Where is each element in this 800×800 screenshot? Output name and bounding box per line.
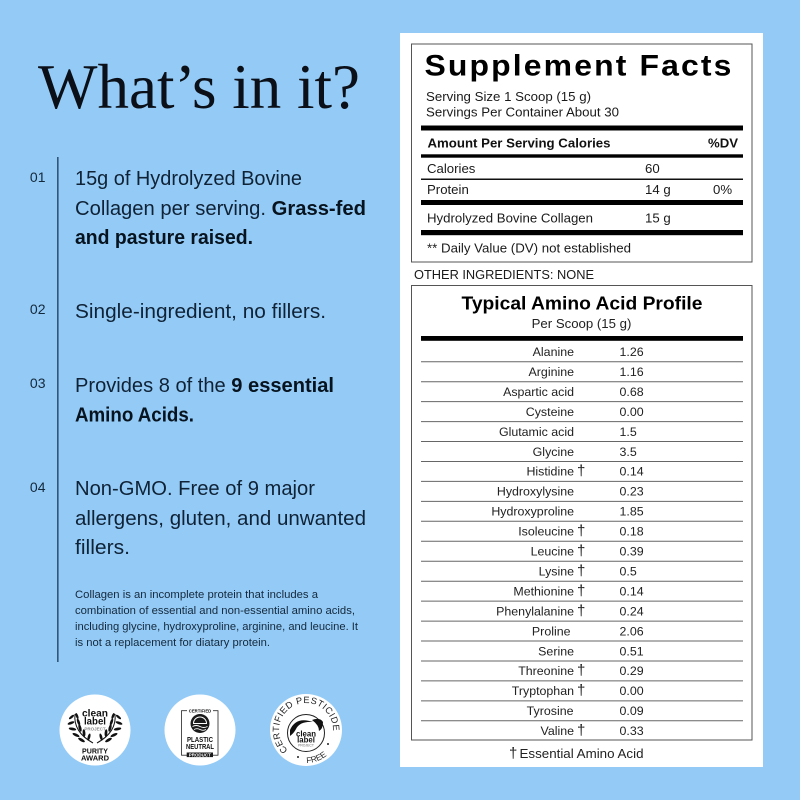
badge: clean label purity award: PROJECT [84,726,106,732]
list item 04: 04 [30,479,46,495]
collagen disclaimer text: Collagen is an incomplete protein that includes a [75,589,319,601]
vertical timeline rule [57,157,58,662]
amino acid table: 1.16 [620,365,644,379]
amino acid table: Methionine [513,584,574,598]
badge: plastic neutral product: PLASTIC [187,735,214,744]
amino acid table [421,345,743,739]
amino acid table: Tryptophan [512,684,574,698]
amino acid table: 0.00 [620,405,644,419]
amino acid table: 0.51 [620,644,644,658]
row: calories: Calories [427,161,476,176]
amino acid table: † [577,463,585,480]
amino acid table: 1.5 [620,425,637,439]
row: hydrolyzed bovine collagen: Hydrolyzed Bovine Collagen [427,210,593,225]
amino acid table: Histidine [526,465,574,479]
amino acid table: 0.14 [620,465,644,479]
amino acid table: † [577,523,585,540]
amino acid table: † [577,582,585,599]
badge: plastic neutral product: PRODUCT [189,752,211,757]
badge: plastic neutral product: CERTIFIED [189,708,212,714]
table header: %DV [708,135,738,150]
other ingredients: OTHER INGREDIENTS: NONE [414,267,594,282]
list item 03: Provides 8 of the 9 essential [75,375,334,397]
amino acid table: 2.06 [620,624,644,638]
title: What’s in it? [38,52,360,122]
amino acid table: 0.23 [620,485,644,499]
list item 03: 03 [30,375,46,391]
badge: certified pesticide free: PROJECT [298,744,314,748]
collagen disclaimer text [75,589,359,649]
amino acid table: 0.29 [620,664,644,678]
badge: certified pesticide free: CERTIFIED PESTICIDE [272,696,340,753]
amino acid table: 0.5 [620,564,637,578]
amino acid table: 0.39 [620,544,644,558]
badge: clean label purity award [60,694,130,766]
amino acid table: 0.14 [620,584,644,598]
list item 02: Single-ingredient, no fillers. [75,301,326,323]
serving information: Servings Per Container About 30 [426,105,619,120]
row: hydrolyzed bovine collagen: 15 g [645,210,671,225]
badge: certified pesticide free: label [297,736,315,744]
row: protein: 0% [713,182,732,197]
amino acid table: † [577,722,585,739]
row: calories: 60 [645,161,660,176]
footnote: daily value: ** Daily Value (DV) not established [427,240,631,255]
panel: supplement facts [412,44,752,262]
list item 01: 15g of Hydrolyzed Bovine [75,168,302,190]
amino acid table: † [577,542,585,560]
amino acid table: Aspartic acid [503,385,574,399]
row: protein: Protein [427,182,469,197]
amino acid table: Proline [532,624,571,638]
amino acid table: Lysine [539,564,574,578]
amino acid table: 1.85 [620,505,644,519]
heading: typical amino acid profile: Typical Amino Acid Profile [462,292,702,313]
collagen disclaimer text: including glycine, hydroxyproline, arginine, and leucine. It [75,621,359,633]
badge: clean label purity award: clean [82,708,108,720]
table header [428,135,738,150]
amino acid table: Tyrosine [527,704,574,718]
amino acid table: 0.33 [620,724,644,738]
badge: certified pesticide free: clean [296,730,316,738]
row: calories [427,161,660,176]
amino acid table: 0.09 [620,704,644,718]
row: protein: 14 g [645,182,671,197]
amino acid table: Hydroxylysine [497,485,574,499]
amino acid table: Leucine [531,544,574,558]
list item 03 [30,375,334,426]
list item 01: Collagen per serving. Grass-fed [75,198,366,220]
badge: plastic neutral product: NEUTRAL [186,742,214,751]
footnote: essential amino acid: Essential Amino Acid [520,746,644,761]
amino acid table: Serine [538,644,574,658]
badge: clean label purity award: label [84,716,106,728]
badge: clean label purity award: AWARD [81,754,110,762]
heading: supplement facts: Supplement Facts [424,50,734,82]
amino acid table: Cysteine [526,405,574,419]
amino acid table: Phenylalanine [496,604,574,618]
list item 04: Non-GMO. Free of 9 major [75,478,315,500]
footnote: essential amino acid: † [509,745,517,762]
amino acid table: † [577,562,585,580]
badge: plastic neutral product [164,694,236,766]
amino acid table: 0.18 [620,525,644,539]
collagen disclaimer text: is not a replacement for diatary protein. [75,637,270,649]
amino acid table: Hydroxyproline [491,505,574,519]
list item 01: 01 [30,169,46,185]
panel: amino acid profile [412,286,752,740]
amino acid table: † [577,602,585,619]
amino acid table: † [577,662,585,679]
list item 03: Amino Acids. [75,404,194,426]
list item 04: fillers. [75,537,130,559]
list item 04: allergens, gluten, and unwanted [75,508,366,530]
subheading: per scoop: Per Scoop (15 g) [532,316,631,331]
amino acid table: 3.5 [620,445,637,459]
serving information [426,89,619,120]
amino acid table: 0.00 [620,684,644,698]
amino acid table: 0.24 [620,604,644,618]
badge: certified pesticide free: FREE [306,751,326,763]
row: hydrolyzed bovine collagen [427,210,671,225]
amino acid table: Isoleucine [518,525,574,539]
amino acid table: Valine [540,724,574,738]
amino acid table: 1.26 [620,345,644,359]
amino acid table: † [577,682,585,699]
badge: clean label purity award: PURITY [82,746,108,756]
amino acid table: Glutamic acid [499,425,574,439]
amino acid table: 0.68 [620,385,644,399]
list item 01: and pasture raised. [75,227,253,249]
table header: Amount Per Serving Calories [428,135,610,150]
amino acid table: Glycine [533,445,574,459]
panel: white label background [400,33,763,767]
list item 01 [30,168,366,249]
amino acid table: Alanine [533,345,574,359]
row: protein [427,182,732,197]
list item 04 [30,478,366,559]
collagen disclaimer text: combination of essential and non-essential amino acids, [75,605,355,617]
list item 02: 02 [30,301,46,317]
amino acid table: Threonine [518,664,574,678]
serving information: Serving Size 1 Scoop (15 g) [426,89,591,104]
amino acid table: Arginine [529,365,574,379]
